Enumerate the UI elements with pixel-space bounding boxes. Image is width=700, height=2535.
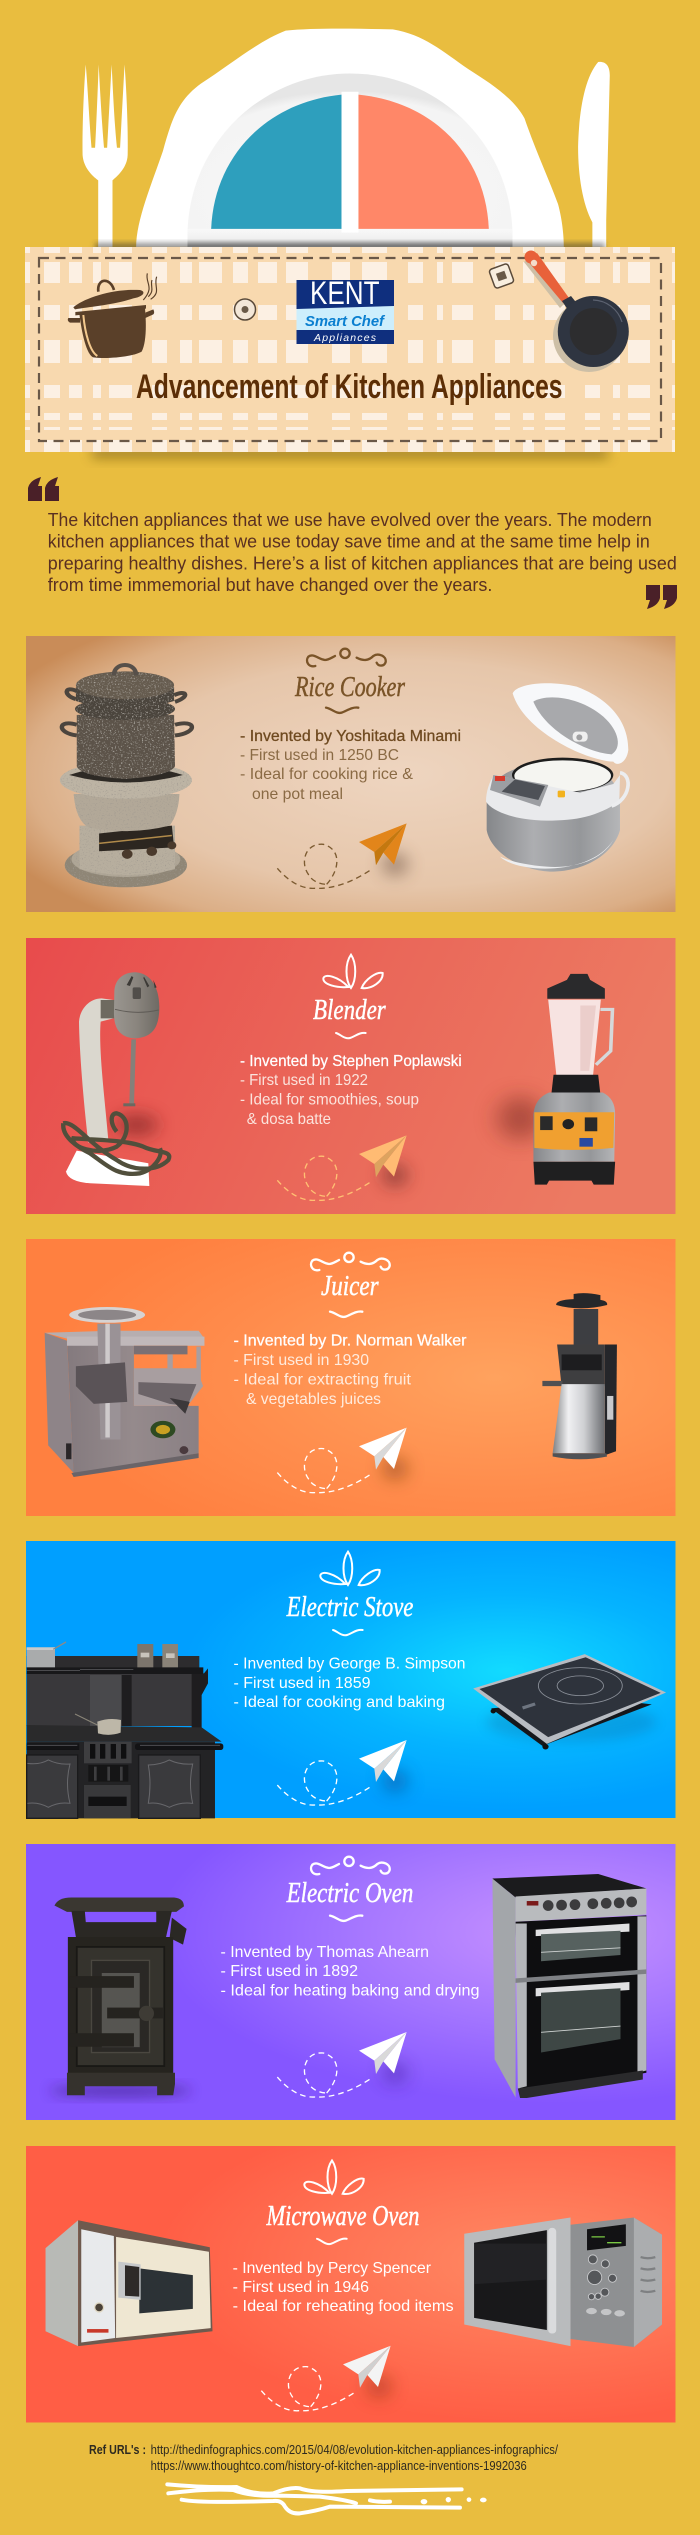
icon: paper plane with dashed trail xyxy=(261,2346,392,2411)
panel background xyxy=(26,938,676,1214)
ornament xyxy=(320,1552,380,1635)
stitched dashed border xyxy=(39,258,661,441)
facts xyxy=(240,1053,462,1128)
facts: - Ideal for smoothies, soup xyxy=(240,1092,419,1108)
panel background xyxy=(26,636,676,912)
footer brush scribble xyxy=(167,2484,487,2513)
old juicer xyxy=(45,1307,204,1477)
plate well shaded lower edge xyxy=(187,229,512,247)
references: https://www.thoughtco.com/history-of-kitchen-appliance-inventions-1992036 xyxy=(151,2459,527,2473)
induction cooktop xyxy=(473,1654,666,1749)
modern rice cooker xyxy=(486,683,628,872)
panel: juicer xyxy=(26,1239,676,1516)
facts xyxy=(240,728,461,803)
icon: paper plane with dashed trail xyxy=(277,1428,408,1493)
intro text: The kitchen appliances that we use have evolved over the years. The modern xyxy=(48,510,652,530)
ornament xyxy=(323,955,383,1038)
salmon plate section xyxy=(358,95,489,229)
plate rim xyxy=(136,29,564,247)
tablecloth xyxy=(25,247,675,452)
stockpot on shelf xyxy=(27,1642,66,1667)
white plate divider xyxy=(341,92,358,233)
panel: microwave oven xyxy=(26,2146,676,2422)
logo: KENT Smart Chef Appliances xyxy=(296,275,394,344)
old milkshake blender xyxy=(63,972,169,1186)
facts: - Ideal for extracting fruit xyxy=(234,1372,412,1388)
facts: - First used in 1892 xyxy=(220,1963,358,1980)
small pot on cooktop xyxy=(75,1714,121,1735)
modern blender xyxy=(498,974,615,1185)
logo: KENT Smart Chef Appliances: KENT xyxy=(310,275,380,311)
ornament xyxy=(311,1857,390,1921)
facts: - Ideal for cooking and baking xyxy=(234,1694,445,1711)
facts: - Invented by Thomas Ahearn xyxy=(220,1944,429,1961)
facts: - First used in 1922 xyxy=(240,1072,368,1089)
facts: & dosa batte xyxy=(247,1111,331,1128)
old cast-iron stove xyxy=(27,1642,223,1818)
ornament xyxy=(304,2160,364,2244)
facts: - Ideal for heating baking and drying xyxy=(220,1982,480,2000)
panel: electric stove xyxy=(26,1541,676,1818)
icon: paper plane with dashed trail xyxy=(277,2032,408,2097)
facts: - First used in 1930 xyxy=(234,1352,369,1369)
ornament xyxy=(307,649,386,713)
references: Ref URL's : xyxy=(89,2443,146,2457)
facts: one pot meal xyxy=(252,786,343,803)
facts xyxy=(234,1333,467,1408)
plate well xyxy=(187,73,512,247)
panel background xyxy=(26,1844,676,2120)
icon: steaming pot xyxy=(68,273,157,358)
old rice cooker xyxy=(60,665,192,887)
intro text: preparing healthy dishes. Here’s a list of kitchen appliances that are being used xyxy=(48,553,677,573)
facts: - Ideal for cooking rice & xyxy=(240,766,413,783)
facts: - Invented by Yoshitada Minami xyxy=(240,728,461,745)
icon: knife xyxy=(578,62,610,247)
references xyxy=(89,2443,558,2473)
modern juicer xyxy=(542,1293,617,1459)
icon: frying pan xyxy=(524,250,629,372)
plate with cutlery xyxy=(82,29,610,247)
modern oven xyxy=(492,1874,646,2098)
facts xyxy=(233,2260,454,2315)
modern microwave xyxy=(464,2218,662,2347)
intro text: from time immemorial but have changed over the years. xyxy=(48,575,492,595)
panel: electric oven xyxy=(26,1844,676,2120)
heading: Microwave Oven xyxy=(266,2201,420,2232)
panel background xyxy=(26,2146,676,2422)
panel: blender xyxy=(26,938,676,1214)
logo: KENT Smart Chef Appliances: Appliances xyxy=(313,332,377,344)
heading: Blender xyxy=(313,995,386,1026)
icon: closing quote xyxy=(646,585,677,609)
icon: paper plane with dashed trail xyxy=(277,823,408,888)
intro text xyxy=(48,510,677,595)
facts: - Invented by Stephen Poplawski xyxy=(240,1053,462,1070)
facts xyxy=(220,1944,480,2000)
facts: - First used in 1946 xyxy=(233,2279,369,2296)
facts: - First used in 1250 BC xyxy=(240,747,399,764)
panel: rice cooker xyxy=(26,636,676,912)
icon: fork xyxy=(82,64,128,247)
icon: small square token xyxy=(489,263,514,289)
header: plate, cutlery and tablecloth xyxy=(25,29,675,458)
facts: - First used in 1859 xyxy=(234,1675,371,1692)
icon: paper plane with dashed trail xyxy=(277,1135,408,1200)
heading: Rice Cooker xyxy=(294,672,405,703)
references: http://thedinfographics.com/2015/04/08/evolution-kitchen-appliances-infographics/ xyxy=(151,2443,558,2457)
facts: - Invented by Dr. Norman Walker xyxy=(234,1333,467,1350)
shadow above tablecloth xyxy=(95,243,605,251)
facts: - Invented by Percy Spencer xyxy=(233,2260,432,2277)
icon: opening quote xyxy=(28,477,59,501)
heading: Juicer xyxy=(321,1271,379,1302)
facts: - Ideal for reheating food items xyxy=(233,2298,454,2315)
ornament xyxy=(311,1253,390,1317)
blue plate section xyxy=(211,95,341,229)
icon: paper plane with dashed trail xyxy=(277,1740,408,1805)
facts xyxy=(234,1655,466,1711)
facts: & vegetables juices xyxy=(246,1391,381,1408)
heading: Electric Oven xyxy=(286,1878,413,1909)
old cast-iron oven xyxy=(49,1897,192,2097)
panel background xyxy=(26,1239,676,1516)
two canisters on shelf xyxy=(137,1644,178,1667)
icon: small button xyxy=(234,299,256,320)
logo: KENT Smart Chef Appliances: Smart Chef xyxy=(305,313,386,330)
facts: - Invented by George B. Simpson xyxy=(234,1655,466,1672)
shadow under tablecloth xyxy=(92,448,608,458)
panel background xyxy=(26,1541,676,1818)
old microwave xyxy=(46,2220,212,2346)
heading: Electric Stove xyxy=(286,1592,413,1623)
intro text: kitchen appliances that we use today save time and at the same time help in xyxy=(48,532,650,552)
